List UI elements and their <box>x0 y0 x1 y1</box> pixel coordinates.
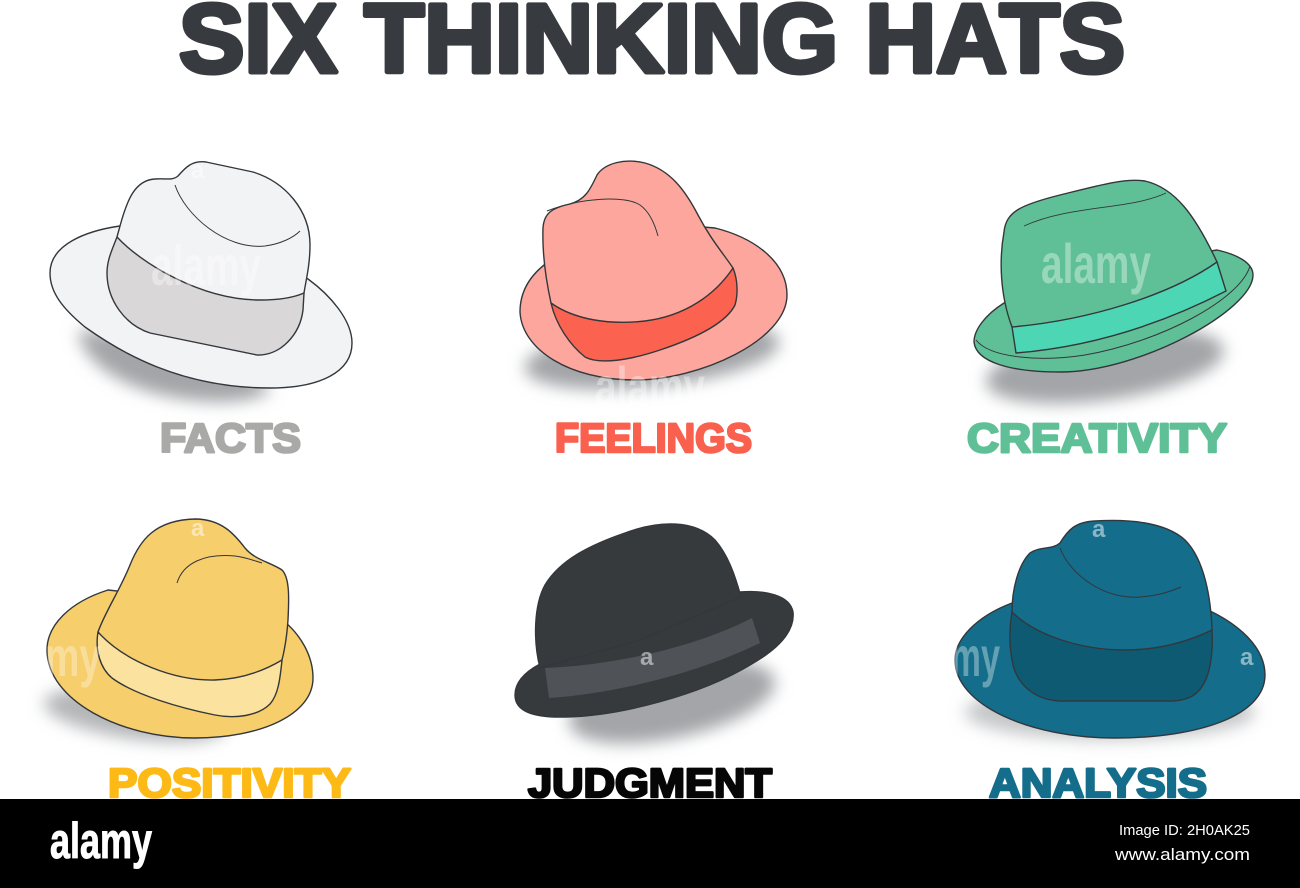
hat: blue analysis <box>922 516 1265 740</box>
hat: black judgment <box>515 524 793 759</box>
hat: green creativity: alamy <box>1041 232 1151 295</box>
hat: white facts: alamy <box>151 234 261 297</box>
image id: Image ID: 2H0AK25 <box>1119 823 1250 839</box>
hat: red feelings: alamy <box>595 355 705 418</box>
hat: red feelings <box>520 161 787 418</box>
label: positivity: POSITIVITY <box>108 760 351 806</box>
hat: white facts <box>50 157 352 402</box>
hat: black judgment: a <box>640 644 654 671</box>
footer bar <box>0 799 1300 888</box>
label: feelings: FEELINGS <box>555 415 752 461</box>
website: www.alamy.com <box>1114 845 1250 864</box>
label: facts: FACTS <box>160 415 301 461</box>
hat: blue analysis: a <box>1240 644 1254 671</box>
hat: blue analysis: lamy <box>922 625 1000 688</box>
hat: green creativity <box>974 180 1253 416</box>
label: judgment: JUDGMENT <box>528 760 772 806</box>
hat: blue analysis: a <box>1092 516 1106 543</box>
hat: white facts: a <box>191 157 205 184</box>
hat: yellow positivity: a <box>191 515 205 542</box>
footer logo: alamy <box>50 813 152 869</box>
label: creativity: CREATIVITY <box>967 415 1227 461</box>
label: analysis: ANALYSIS <box>989 760 1207 806</box>
hat: yellow positivity <box>0 515 313 752</box>
